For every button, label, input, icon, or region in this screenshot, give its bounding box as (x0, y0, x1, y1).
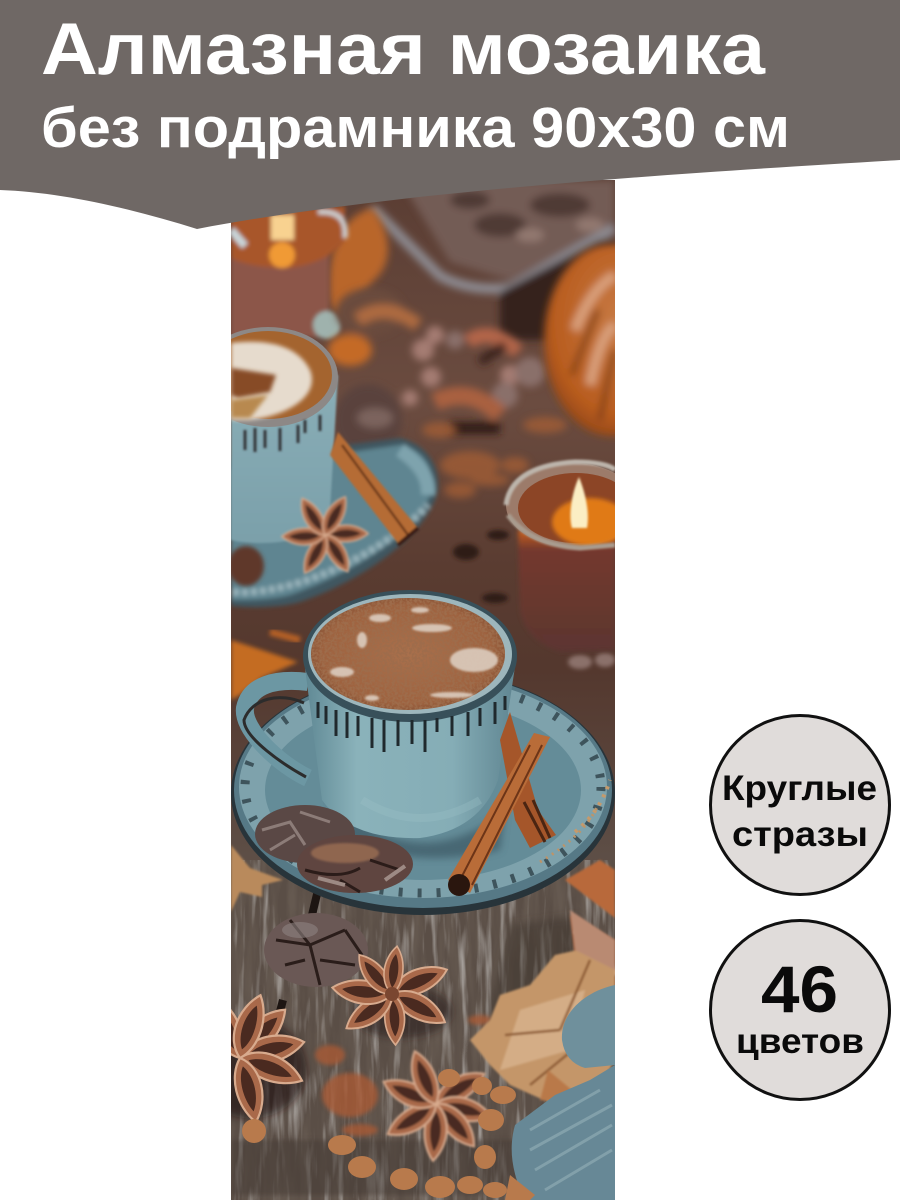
right candle (502, 458, 615, 648)
top left candle (231, 206, 345, 339)
photo: coffee still life (231, 180, 615, 1200)
second cup (231, 327, 340, 544)
right leaves behind saucer (565, 860, 615, 1000)
star anise upper (282, 493, 368, 577)
badge: round rhinestones: Круглые (722, 769, 877, 808)
second saucer (231, 438, 438, 607)
banner (0, 0, 900, 229)
walnut (228, 546, 264, 586)
knitted sweater (512, 985, 615, 1200)
cookies on saucer (255, 805, 413, 893)
fallen leaves left (231, 640, 298, 700)
drip glaze (318, 696, 505, 752)
badge: 46 colours: цветов (736, 1022, 864, 1061)
badge: round rhinestones: стразы (732, 815, 868, 854)
pumpkin (538, 239, 615, 440)
orange leaf background (329, 208, 388, 313)
cocoa powder on table (422, 417, 567, 498)
background tray with beans (372, 180, 615, 340)
title: Алмазная мозаика (41, 9, 767, 90)
coffee beans on table (453, 530, 615, 669)
latte foam (330, 607, 498, 701)
cinnamon sticks on saucer (448, 712, 556, 896)
dried leaf right (470, 910, 615, 1105)
star anise center (331, 945, 452, 1045)
cinnamon stick upper (330, 432, 418, 546)
lower wood planks (231, 860, 615, 1200)
subtitle: без подрамника 90х30 см (41, 96, 790, 160)
cookie on table (264, 913, 368, 987)
autumn leaf left (231, 845, 283, 912)
cocoa powder pile (315, 1015, 492, 1136)
badge: 46 colours (710, 920, 890, 1100)
coffee beans foreground (242, 1069, 535, 1200)
star anise left (231, 994, 310, 1123)
badge: round rhinestones (710, 716, 890, 894)
blurred anise and beans midground (328, 288, 545, 456)
badge: 46 colours: 46 (761, 952, 838, 1026)
star anise lower (379, 1047, 494, 1162)
main cup (244, 590, 517, 838)
main saucer (231, 671, 615, 915)
